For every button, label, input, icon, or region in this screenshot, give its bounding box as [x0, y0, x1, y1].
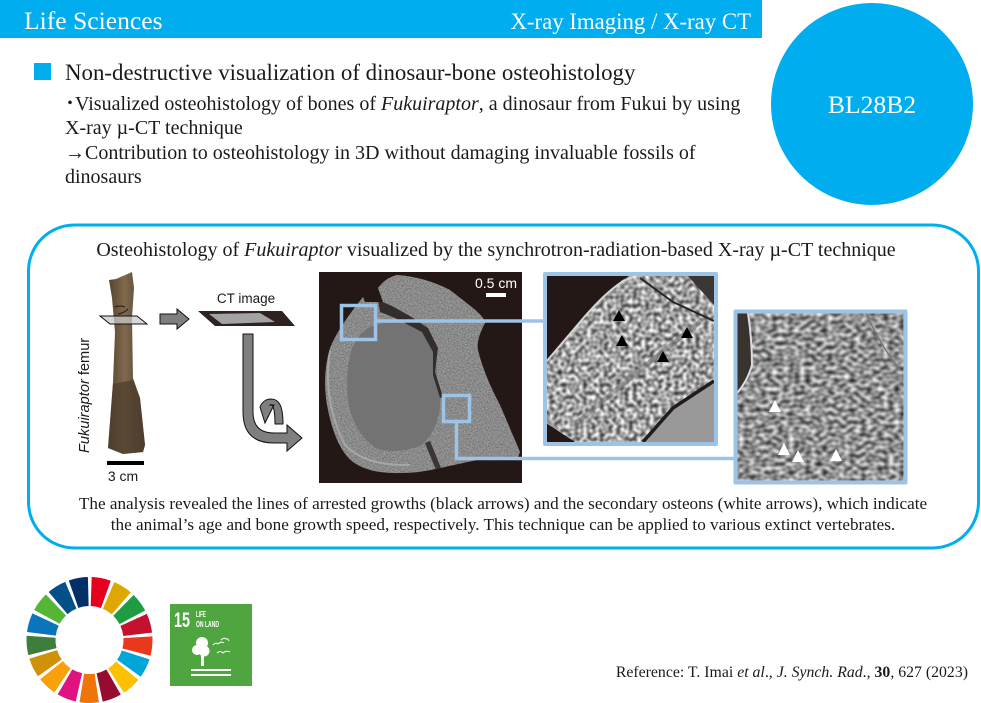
arrow: CT image to cross section: [243, 334, 302, 451]
summary text: dinosaurs: [65, 166, 142, 188]
icon: SDGs color wheel: [21, 571, 158, 703]
summary text: Fukuiraptor, a dinosaur from Fukui by using: [381, 93, 740, 115]
icon: SDG 15 life on land: ON LAND: [196, 620, 219, 629]
figure caption: the animal’s age and bone growth speed, respectively. This technique can be applied to various extinct vertebrates.: [111, 515, 895, 534]
panel: osteohistology figure: [28, 225, 978, 548]
detail 2 image: secondary osteons: [737, 313, 904, 481]
summary text: →Contribution to osteohistology in 3D without damaging invaluable fossils of: [65, 142, 696, 164]
summary text: [60, 93, 740, 188]
scale bar: 3 cm: 3 cm: [108, 468, 138, 484]
medullary region: [347, 322, 440, 451]
arrow: femur to CT image: [160, 309, 189, 329]
icon: SDG 15 life on land: LIFE: [196, 610, 206, 619]
icon: SDG 15 life on land: 15: [174, 609, 190, 632]
CT image slice: CT image: [217, 291, 275, 306]
white arrowheads: [769, 400, 842, 462]
beamline badge: BL28B2: [828, 90, 916, 119]
summary text: X-ray µ-CT technique: [65, 117, 243, 139]
connectors and frames: [342, 274, 906, 482]
slice plane: [100, 316, 147, 324]
summary text: ・: [60, 93, 80, 115]
femur label: Fukuiraptor femur: [77, 338, 93, 453]
technique label: X-ray Imaging / X-ray CT: [510, 9, 751, 34]
title: Non-destructive visualization of dinosaur-bone osteohistology: [65, 60, 636, 85]
figure caption: [79, 494, 927, 534]
beamline badge: [771, 3, 973, 205]
femur photo: [100, 272, 147, 454]
figure caption: The analysis revealed the lines of arrested growths (black arrows) and the secondary osteons (white arrows), which indicate: [79, 494, 927, 513]
icon: rotation arrow: [260, 399, 283, 424]
reference: Reference: T. Imai et al., J. Synch. Rad., 30, 627 (2023): [616, 664, 968, 681]
panel heading: Osteohistology of Fukuiraptor visualized by the synchrotron-radiation-based X-ray µ-CT technique: [96, 239, 896, 261]
header bar: [0, 0, 762, 38]
summary text: Visualized osteohistology of bones of: [75, 93, 381, 115]
category label: Life Sciences: [24, 6, 163, 35]
CT cross section image: [319, 272, 522, 483]
detail 1 image: lines of arrested growth: [546, 275, 714, 442]
dark cavity: [378, 300, 443, 398]
CT image slice: [198, 291, 295, 326]
scale bar: 3 cm: [107, 461, 144, 484]
icon: SDG 15 life on land: [170, 604, 252, 686]
scale bar: 0.5 cm: 0.5 cm: [475, 275, 517, 291]
black arrowheads: [613, 310, 693, 362]
